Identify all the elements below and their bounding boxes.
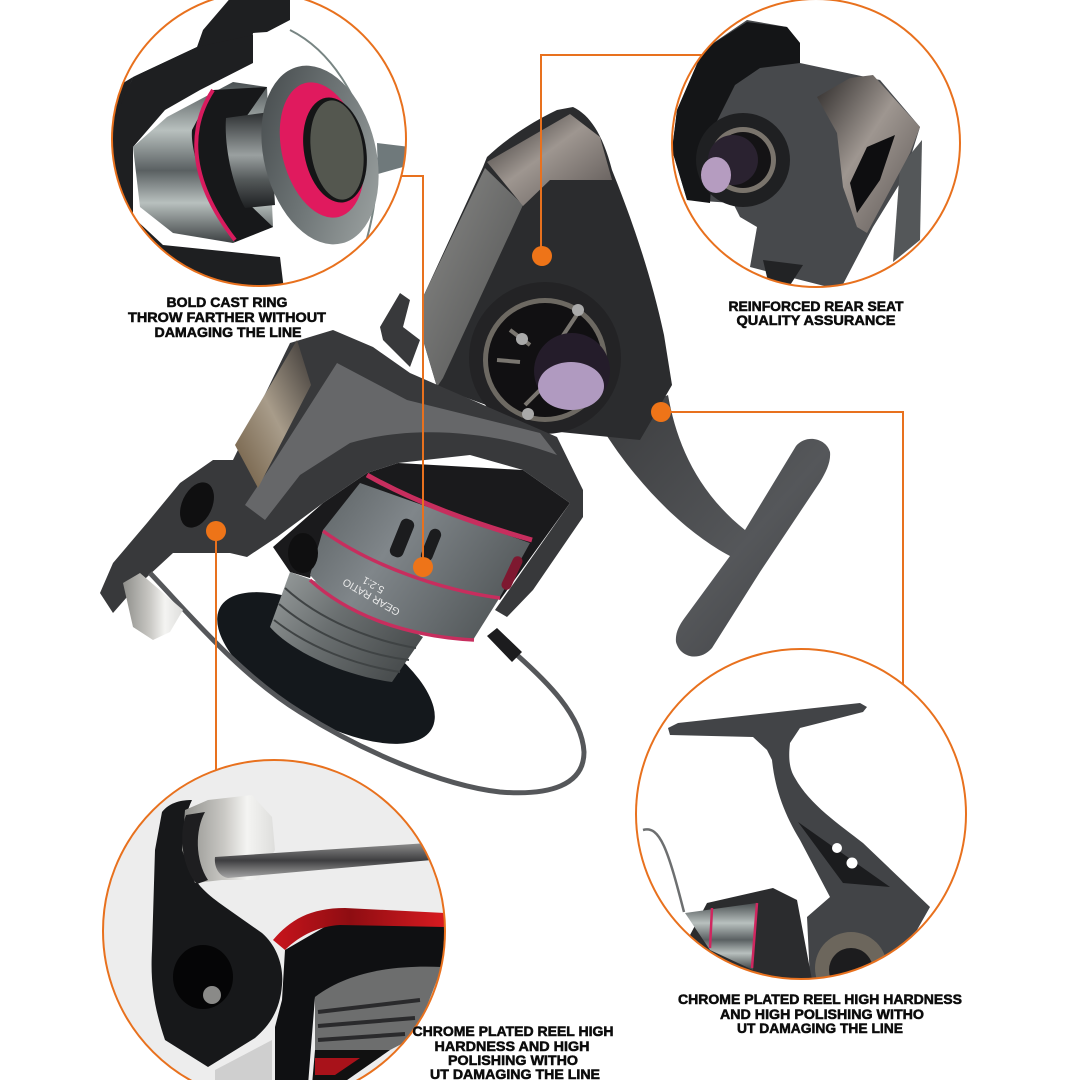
spool body [288, 475, 532, 640]
caption: bold cast ring [128, 294, 326, 340]
rotor chrome plate [235, 340, 311, 488]
housing side band [423, 168, 523, 387]
circle: chrome plated reel handle [635, 648, 967, 980]
bail arm lever [380, 293, 420, 367]
spool body: GEAR RATIO [341, 575, 402, 618]
caption: reinforced rear seat: REINFORCED REAR SEAT [728, 298, 904, 314]
caption: reinforced rear seat [728, 298, 904, 328]
reel handle arm [600, 395, 830, 657]
caption: bold cast ring: DAMAGING THE LINE [154, 324, 302, 340]
bail wire [150, 573, 584, 793]
main reel [100, 107, 830, 793]
spool body: 5.2:1 [360, 573, 387, 596]
caption: chrome plated reel right: CHROME PLATED REEL HIGH HARDNESS [678, 991, 962, 1007]
callout marker dots [206, 246, 671, 577]
callout connector lines [216, 55, 903, 771]
circle: reinforced rear seat [671, 0, 961, 288]
circle: bold cast ring [111, 0, 407, 287]
spool flange base [194, 562, 458, 774]
caption: chrome plated reel left: HARDNESS AND HIGH [434, 1038, 590, 1054]
caption: chrome plated reel right: UT DAMAGING THE LINE [737, 1020, 903, 1036]
rotor dark underside [273, 463, 570, 600]
spool threaded section [270, 572, 423, 682]
rotor grey wedge [245, 363, 557, 520]
caption: reinforced rear seat: QUALITY ASSURANCE [736, 312, 896, 328]
caption: chrome plated reel left [412, 1023, 614, 1080]
handle knob hub [469, 282, 621, 434]
line roller [123, 573, 183, 640]
caption: bold cast ring: THROW FARTHER WITHOUT [128, 309, 326, 325]
caption: chrome plated reel left: CHROME PLATED REEL HIGH [412, 1023, 614, 1039]
bail clamp [487, 628, 522, 662]
circle: line roller detail [100, 755, 450, 1080]
rear seat chrome cap [487, 114, 612, 206]
rotor body [100, 330, 583, 617]
caption: chrome plated reel right [678, 991, 962, 1036]
caption: bold cast ring: BOLD CAST RING [166, 294, 288, 310]
caption: chrome plated reel left: POLISHING WITHO [448, 1052, 578, 1068]
bail screw arm hole [173, 477, 221, 533]
caption: chrome plated reel right: AND HIGH POLISHING WITHO [720, 1006, 924, 1022]
rear housing [423, 107, 672, 440]
